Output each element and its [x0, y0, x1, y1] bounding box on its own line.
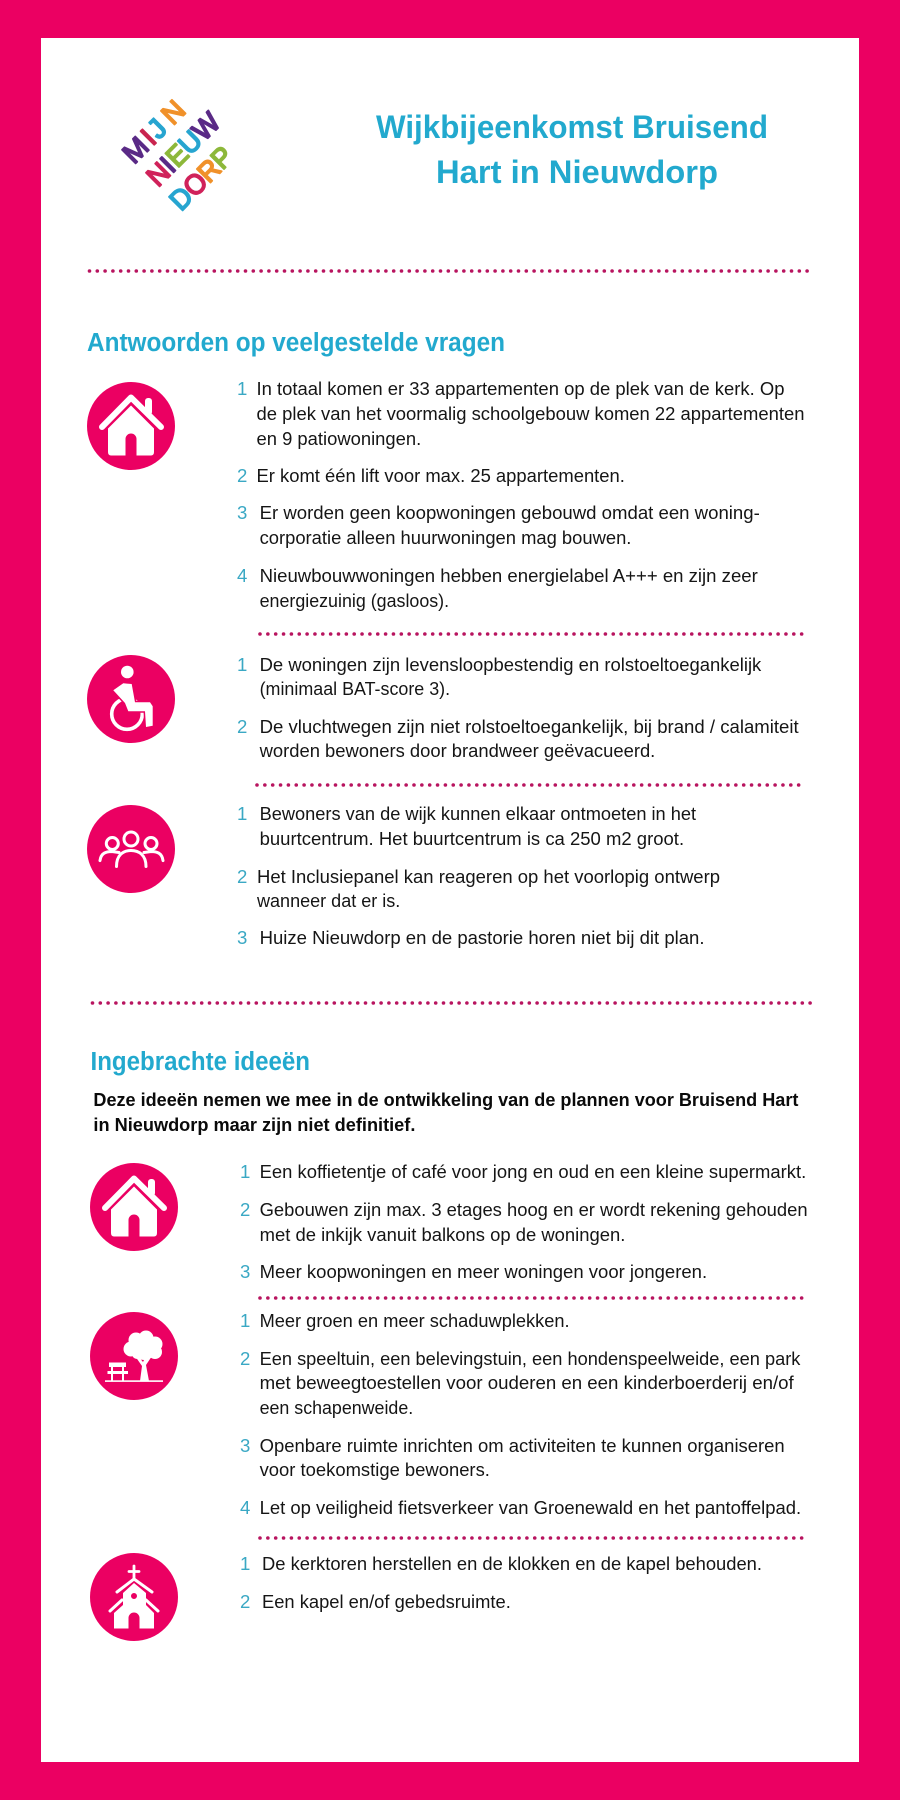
intro text	[93, 1089, 798, 1135]
list: green space ideas: Openbare ruimte inrichten om activiteiten te kunnen organiseren	[260, 1435, 785, 1456]
list: green space ideas: 1	[240, 1310, 250, 1331]
list: housing answers: 2	[237, 465, 247, 486]
icon: house	[90, 1163, 178, 1251]
list: housing ideas: Gebouwen zijn max. 3 etages hoog en er wordt rekening gehouden	[260, 1199, 808, 1220]
list: green space ideas: 4	[240, 1497, 250, 1518]
list: community answers: 3	[237, 927, 247, 948]
list: housing answers	[237, 378, 804, 611]
list: community answers: 2	[237, 866, 247, 887]
list: green space ideas: 3	[240, 1435, 250, 1456]
list: accessibility answers: worden bewoners door brandweer geëvacueerd.	[259, 740, 655, 761]
icon: wheelchair	[87, 655, 175, 743]
title: Hart in Nieuwdorp	[436, 154, 718, 190]
list: community answers: Het Inclusiepanel kan reageren op het voorlopig ontwerp	[257, 866, 720, 887]
heading: veelgestelde vragen: Antwoorden op veelgestelde vragen	[87, 329, 505, 357]
panel: answers about accessibility	[87, 654, 800, 761]
list: accessibility answers: 2	[237, 716, 247, 737]
list: housing answers: Er worden geen koopwoningen gebouwd omdat een woning-	[260, 502, 760, 523]
list: green space ideas: een schapenweide.	[260, 1397, 413, 1418]
list: housing answers: In totaal komen er 33 appartementen op de plek van de kerk. Op	[256, 378, 784, 399]
list: housing answers: en 9 patiowoningen.	[256, 428, 421, 449]
list: housing ideas: 2	[240, 1199, 250, 1220]
list: accessibility answers: De woningen zijn levensloopbestendig en rolstoeltoegankelijk	[260, 654, 762, 675]
list: green space ideas: Een speeltuin, een belevingstuin, een hondenspeelweide, een park	[260, 1348, 801, 1369]
logo: Mijn Nieuwdorp: MIJN	[116, 94, 191, 169]
list: housing ideas: 1	[240, 1161, 250, 1182]
list: accessibility answers: 1	[237, 654, 247, 675]
list: green space ideas	[240, 1310, 801, 1518]
list: green space ideas: met beweegtoestellen voor ouderen en een kinderboerderij en/of	[260, 1372, 795, 1393]
list: church ideas: 2	[240, 1591, 250, 1612]
panel: answers about community	[87, 803, 720, 948]
list: community answers: 1	[237, 803, 247, 824]
icon: tree and bench	[90, 1312, 178, 1400]
title	[376, 109, 768, 190]
list: housing answers: corporatie alleen huurwoningen mag bouwen.	[260, 527, 631, 548]
list: housing answers: 3	[237, 502, 247, 523]
list: community answers: Huize Nieuwdorp en de pastorie horen niet bij dit plan.	[260, 927, 704, 948]
title: Wijkbijeenkomst Bruisend	[376, 109, 768, 145]
list: green space ideas: 2	[240, 1348, 250, 1369]
heading: ingebrachte ideeen: Ingebrachte ideeën	[90, 1048, 310, 1076]
intro text: Deze ideeën nemen we mee in de ontwikkeling van de plannen voor Bruisend Hart	[93, 1089, 798, 1110]
list: church ideas: De kerktoren herstellen en de klokken en de kapel behouden.	[262, 1553, 762, 1574]
list: housing answers: energiezuinig (gasloos).	[260, 590, 449, 611]
list: housing answers: de plek van het voormalig schoolgebouw komen 22 appartementen	[256, 403, 804, 424]
list: housing answers: Er komt één lift voor max. 25 appartementen.	[256, 465, 625, 486]
list: green space ideas: Let op veiligheid fietsverkeer van Groenewald en het pantoffelpad.	[260, 1497, 801, 1518]
list: green space ideas: voor toekomstige bewoners.	[260, 1459, 490, 1480]
intro text: in Nieuwdorp maar zijn niet definitief.	[93, 1114, 415, 1135]
list: accessibility answers: De vluchtwegen zijn niet rolstoeltoegankelijk, bij brand / calamiteit	[260, 716, 800, 737]
list: housing ideas: Meer koopwoningen en meer woningen voor jongeren.	[260, 1261, 707, 1282]
icon: house	[87, 382, 175, 470]
list: green space ideas: Meer groen en meer schaduwplekken.	[260, 1310, 570, 1331]
list: housing ideas: Een koffietentje of café voor jong en oud en een kleine supermarkt.	[260, 1161, 806, 1182]
list: church ideas: 1	[240, 1553, 250, 1574]
list: housing ideas: met de inkijk vanuit balkons op de woningen.	[260, 1224, 625, 1245]
icon: church	[90, 1553, 178, 1641]
panel: answers about housing	[87, 378, 804, 611]
list: housing ideas: 3	[240, 1261, 250, 1282]
logo: Mijn Nieuwdorp: DORP	[163, 140, 239, 216]
list: community answers	[237, 803, 720, 948]
panel: ideas about green space	[90, 1310, 801, 1518]
list: housing answers: 1	[237, 378, 247, 399]
logo: Mijn Nieuwdorp: NIEUW	[140, 106, 227, 192]
list: church ideas: Een kapel en/of gebedsruimte.	[262, 1591, 511, 1612]
logo: Mijn Nieuwdorp	[116, 94, 239, 216]
list: community answers: Bewoners van de wijk kunnen elkaar ontmoeten in het	[260, 803, 697, 824]
icon: people	[87, 805, 175, 893]
panel: ideas about the church	[90, 1553, 762, 1641]
list: housing answers: Nieuwbouwwoningen hebben energielabel A+++ en zijn zeer	[260, 565, 758, 586]
list: housing ideas	[240, 1161, 808, 1282]
list: community answers: buurtcentrum. Het buurtcentrum is ca 250 m2 groot.	[260, 828, 684, 849]
list: community answers: wanneer dat er is.	[256, 890, 400, 911]
list: accessibility answers	[237, 654, 800, 761]
list: accessibility answers: (minimaal BAT-score 3).	[260, 678, 450, 699]
list: church ideas	[240, 1553, 762, 1612]
panel: ideas about housing	[90, 1161, 808, 1282]
list: housing answers: 4	[237, 565, 247, 586]
